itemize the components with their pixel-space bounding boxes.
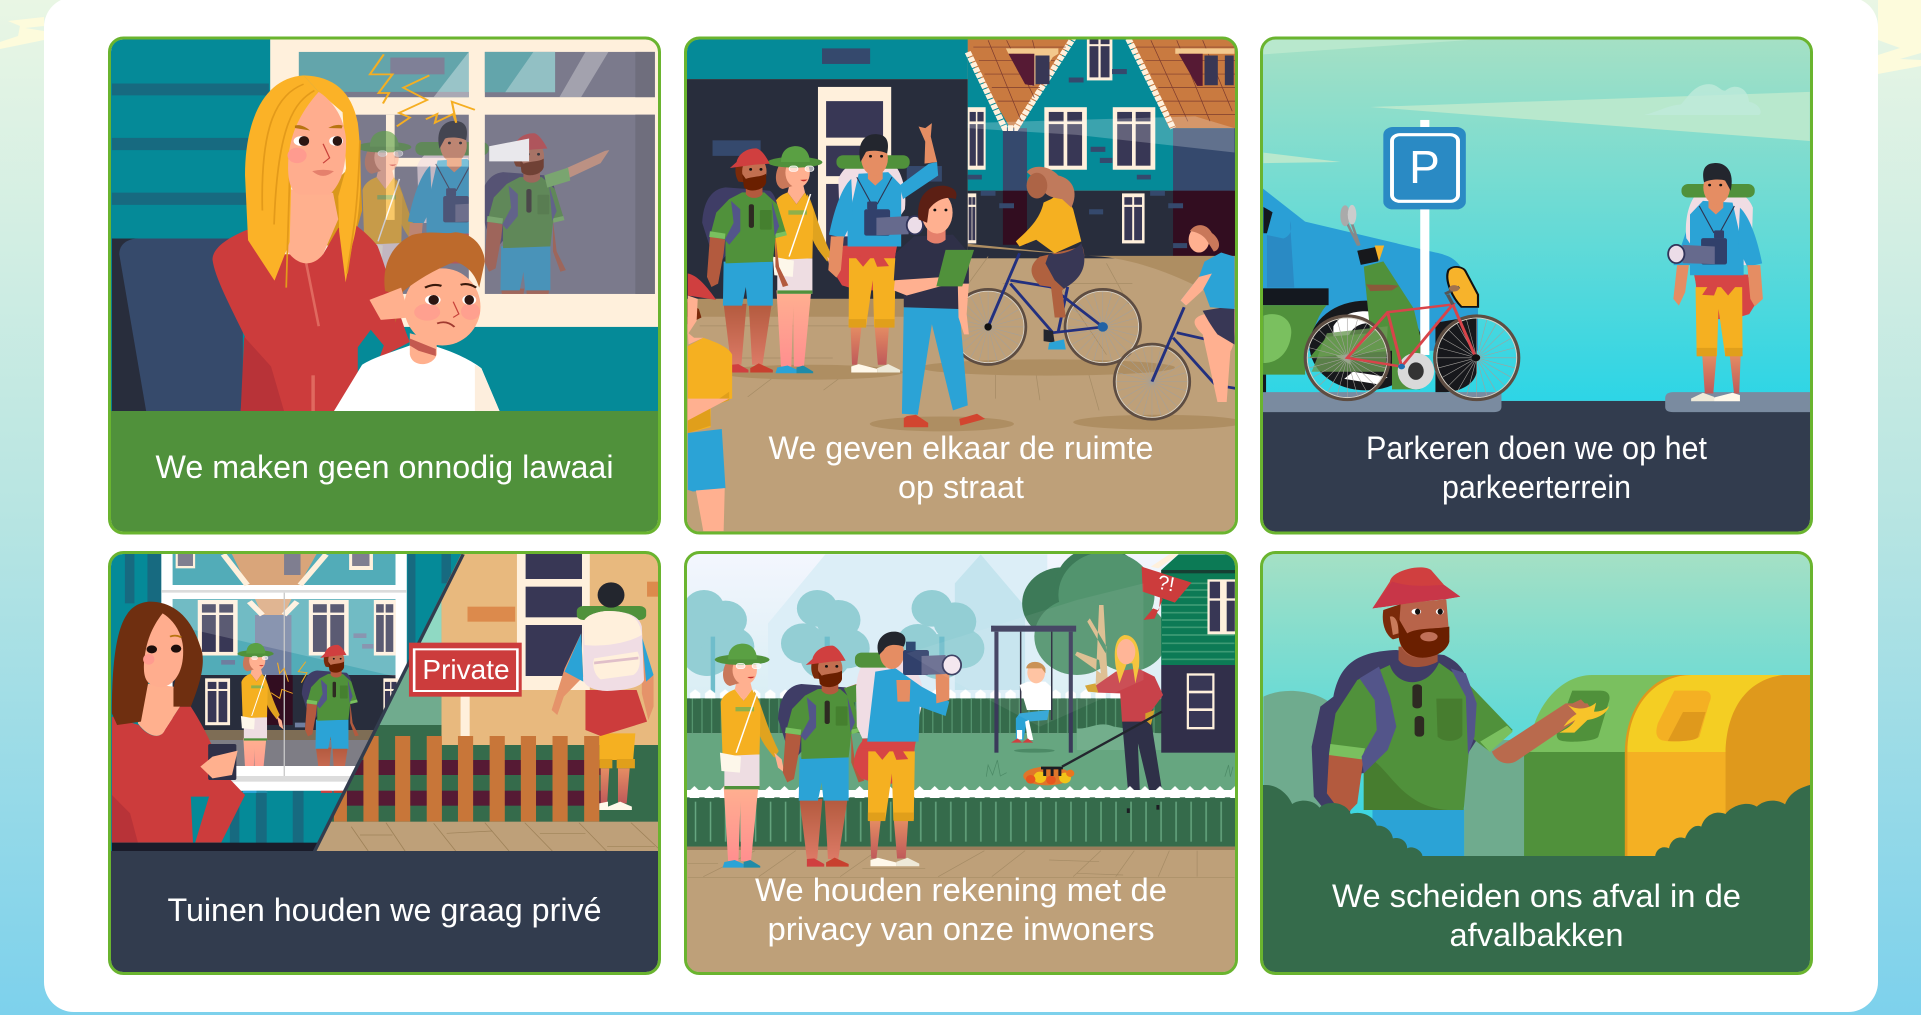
red bicycle xyxy=(1305,285,1519,400)
guide with tablet xyxy=(894,186,985,427)
card border xyxy=(110,552,660,974)
card border xyxy=(1262,552,1812,974)
first cyclist xyxy=(950,167,1141,364)
front fence xyxy=(681,786,1240,847)
woman with brown hair xyxy=(112,602,245,843)
caption text: Tuinen houden we graag privé xyxy=(168,892,602,928)
caption background xyxy=(108,851,661,976)
caption text xyxy=(768,430,1154,505)
panel: privacy card xyxy=(684,551,1238,975)
card border xyxy=(1262,38,1812,533)
tourist with camera xyxy=(828,123,938,373)
curbs xyxy=(1257,392,1501,412)
illustration: parking sign, scooter, bicycle xyxy=(1257,35,1815,541)
tourist photographing xyxy=(854,632,961,866)
leaf pile and rake xyxy=(1023,767,1074,785)
warning flag xyxy=(1142,567,1192,620)
ghosted tourists in window xyxy=(360,120,610,294)
parking sign xyxy=(1383,127,1466,209)
panel: private gardens card xyxy=(108,550,664,976)
man with red hat xyxy=(1312,567,1592,858)
illustration: woman indoors and tourist at garden xyxy=(108,550,664,852)
caption text: We geven elkaar de ruimte xyxy=(768,430,1154,466)
parking sign letter: P xyxy=(1409,141,1440,193)
illustration: man throwing banana peel in waste bin xyxy=(1257,550,1815,976)
panel: parking card xyxy=(1257,35,1815,541)
tourist with red hat xyxy=(702,148,788,373)
panel: street space card xyxy=(681,34,1243,537)
window view of the village xyxy=(161,550,407,793)
scooter xyxy=(1309,205,1434,389)
illustration: mother and child at the window xyxy=(108,35,664,414)
card border xyxy=(110,38,660,533)
houses xyxy=(681,34,1241,299)
diagonal divider xyxy=(314,554,463,852)
house xyxy=(1151,554,1240,753)
room with curtains xyxy=(108,550,468,852)
private garden side xyxy=(304,550,664,852)
caption text xyxy=(755,872,1167,947)
pavement xyxy=(681,847,1240,1015)
card border xyxy=(686,38,1236,533)
caption text xyxy=(1366,430,1707,505)
private sign text: Private xyxy=(422,654,510,685)
parking sign post xyxy=(1420,120,1429,355)
warning flag text: ?! xyxy=(1156,572,1176,596)
caption text: Parkeren doen we op het xyxy=(1366,430,1707,466)
caption text xyxy=(1332,878,1741,953)
sun rays right xyxy=(1878,0,1921,74)
caption text: We scheiden ons afval in de xyxy=(1332,878,1741,914)
caption text: We houden rekening met de xyxy=(755,872,1167,908)
illustration: tourists and cyclists on street xyxy=(681,34,1243,537)
panel: noise card xyxy=(108,35,664,535)
sky and distant houses xyxy=(681,550,1240,700)
child at the left edge xyxy=(688,274,732,531)
sound lightning bolts xyxy=(370,54,475,126)
caption text: op straat xyxy=(898,469,1024,505)
tourist with red hat xyxy=(778,646,910,867)
woman with blonde hair xyxy=(212,75,410,411)
rear garden and fence xyxy=(681,698,1240,733)
illustration: tourists photographing a family garden xyxy=(687,554,1235,972)
caption text: privacy van onze inwoners xyxy=(768,911,1154,947)
car xyxy=(1257,184,1478,392)
sun rays left xyxy=(0,17,44,49)
caption text: We maken geen onnodig lawaai xyxy=(156,449,614,485)
private sign xyxy=(409,643,522,697)
boy holding his ears xyxy=(334,232,500,411)
tourist with green hat xyxy=(715,644,784,868)
caption text: afvalbakken xyxy=(1450,917,1624,953)
mother raking leaves xyxy=(1062,635,1163,790)
tourist with green hat xyxy=(768,146,830,374)
yellow waste bin xyxy=(1625,675,1815,856)
background trees xyxy=(665,590,984,679)
caption background xyxy=(1257,856,1815,976)
second cyclist xyxy=(1114,225,1236,419)
tourist with camera xyxy=(1668,163,1763,401)
tourist seen from behind xyxy=(552,582,654,810)
card border xyxy=(686,552,1236,974)
big tree xyxy=(1022,547,1168,690)
caption background xyxy=(108,411,661,535)
swing set with child xyxy=(991,626,1076,753)
banana peel xyxy=(1559,703,1609,733)
panel: waste card xyxy=(1257,550,1815,976)
hedges xyxy=(1257,785,1815,856)
caption text: parkeerterrein xyxy=(1442,469,1631,505)
green waste bin xyxy=(1524,675,1679,856)
